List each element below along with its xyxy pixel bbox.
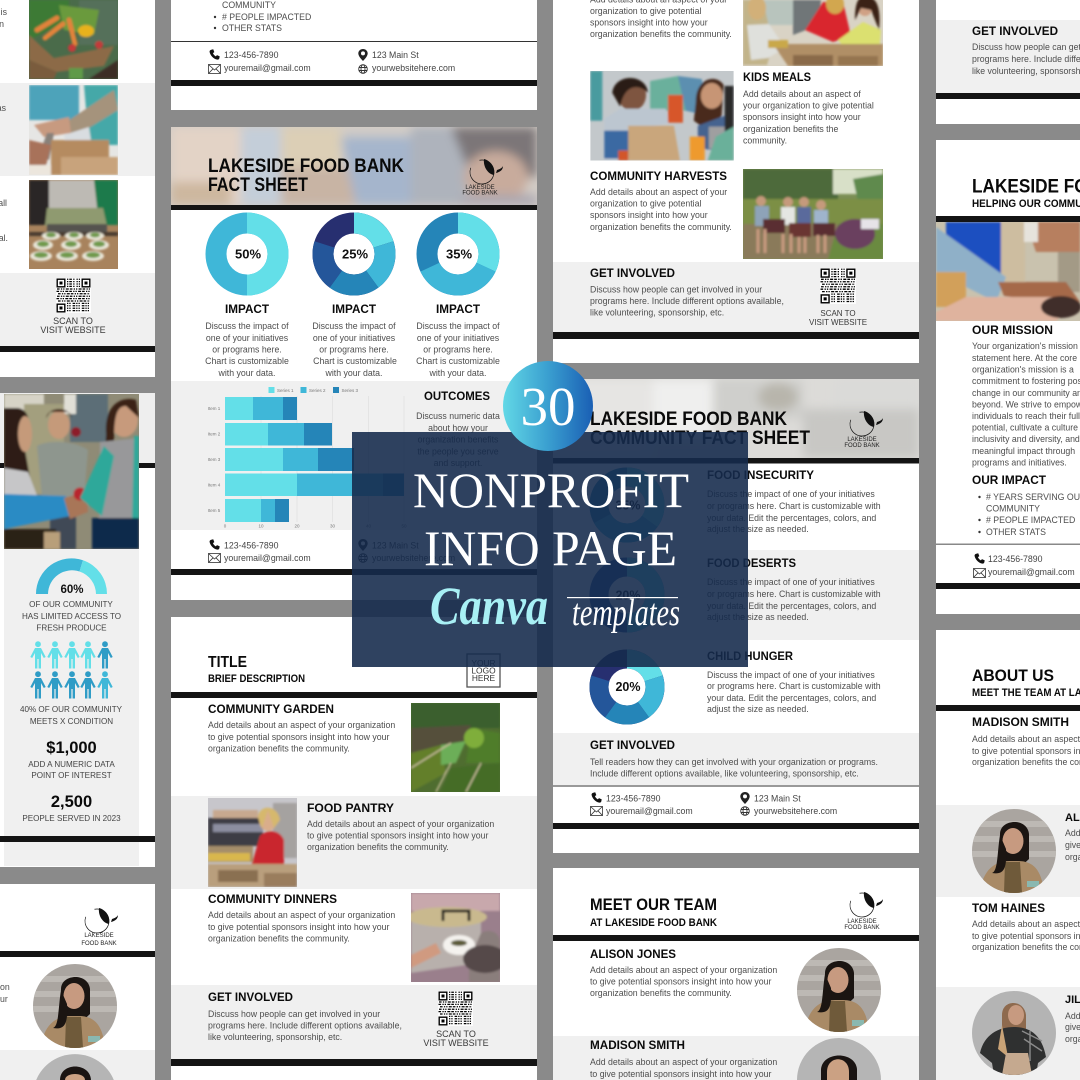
bar: item 2: [225, 423, 332, 446]
text: impact 3: Discuss the impact of: [416, 321, 500, 331]
title: LAKESIDE FOOD BANK: [208, 156, 404, 177]
contact details: youremail@gmail.com: [224, 553, 311, 563]
text: community dinners: organization benefits the community.: [208, 934, 350, 944]
heading: kids meals: KIDS MEALS: [743, 70, 811, 84]
text: impact 2: Discuss the impact of: [312, 321, 396, 331]
title line: info page: INFO PAGE: [424, 520, 677, 576]
text: alison jones: organization benefits the community.: [590, 988, 732, 998]
contact details: 123 Main St: [372, 50, 419, 60]
donut chart: 20% child hunger: [599, 659, 655, 715]
contact details: 123 Main St: [754, 794, 801, 804]
text: impact 3: Chart is customizable: [416, 356, 500, 366]
category labels: Item 1: [208, 406, 221, 411]
photo: pantry volunteer: [208, 798, 297, 887]
heading: alison jones: ALISON JONES: [590, 947, 676, 961]
heading: outcomes: OUTCOMES: [424, 389, 490, 403]
logo: FOOD BANK: [844, 443, 880, 449]
text: outcomes: about how your: [428, 423, 488, 433]
text: first program: organization benefits the community.: [590, 29, 732, 39]
logo: [80, 904, 118, 947]
heading: community harvests: COMMUNITY HARVESTS: [590, 169, 727, 183]
panel: programs sheet left top: [0, 0, 155, 377]
text: community garden: to give potential sponsors insight into how your: [208, 732, 390, 742]
axis labels: 40: [366, 524, 371, 528]
photo: vegetable crate: [29, 0, 118, 79]
stats list: COMMUNITY: [986, 504, 1040, 514]
text: community dinners: to give potential sponsors insight into how your: [208, 922, 390, 932]
contact details: youremail@gmail.com: [606, 806, 693, 816]
bullets: [978, 496, 981, 533]
chart: 60% gauge: [36, 558, 107, 596]
text: community harvests: organization benefits the community.: [590, 222, 732, 232]
contact details: youremail@gmail.com: [224, 63, 311, 73]
bar: item 1: [225, 397, 297, 420]
text: child hunger: your data. Edit the percentages, colors, and: [707, 693, 876, 703]
bar: item 3: [225, 448, 354, 471]
title: TITLE: [208, 654, 247, 671]
logo: FOOD BANK: [81, 941, 117, 947]
text: alison jones: Add details about an aspect of your organization: [590, 965, 777, 975]
title: COMMUNITY FACT SHEET: [590, 428, 810, 449]
text: condition: 40% OF OUR COMMUNITY: [20, 705, 123, 714]
overlay title panel: [352, 432, 748, 667]
stat: 2,500: 2,500: [51, 793, 92, 811]
text: community harvests: Add details about an aspect of your: [590, 187, 727, 197]
title: FACT SHEET: [208, 175, 308, 196]
contact details: 123-456-7890: [224, 540, 279, 550]
text: child hunger: adjust the size as needed.: [707, 704, 809, 714]
gauge value: 60%: [60, 584, 84, 596]
portrait: cropped at frame edge: [36, 1054, 114, 1080]
contact details: [590, 792, 837, 816]
text: condition: MEETS X CONDITION: [30, 717, 113, 726]
legend: Series 2: [309, 388, 326, 393]
badge: 30: [503, 361, 593, 451]
logo placeholder: LOGO: [471, 666, 496, 676]
text: community garden: organization benefits the community.: [208, 744, 350, 754]
logo: FOOD BANK: [462, 190, 498, 196]
text: food pantry: Add details about an aspect of your organization: [307, 819, 494, 829]
text: first program: sponsors insight into how your: [590, 18, 708, 28]
text: food deserts: adjust the size as needed.: [707, 612, 809, 622]
text: kids meals: your organization to give potential: [743, 101, 874, 111]
legend: [268, 387, 359, 393]
portrait: [797, 948, 881, 1032]
text: madison smith: Add details about an aspect of your organization: [590, 1057, 777, 1067]
text: outcomes: and support.: [434, 458, 482, 468]
text: get involved: Tell readers how they can get involved with your organization or programs.: [590, 757, 878, 767]
donut chart: 20% child hunger: 20%: [615, 680, 641, 694]
heading: food insecurity: FOOD INSECURITY: [707, 468, 814, 482]
QR code: [56, 278, 91, 313]
category labels: Item 5: [208, 508, 221, 513]
text: numeric data: POINT OF INTEREST: [31, 771, 112, 780]
text: get involved: programs here. Include different options available,: [208, 1020, 402, 1030]
donut chart: 50%: [216, 223, 278, 285]
text: kids meals: Add details about an aspect of: [743, 89, 861, 99]
panel: right top get involved: [936, 0, 1080, 124]
text: impact 3: one of your initiatives: [417, 333, 500, 343]
stacked bar chart: [208, 387, 407, 528]
text: impact 3: with your data.: [429, 368, 486, 378]
axis labels: 20: [294, 524, 300, 528]
text: get involved: Discuss how people can get involved in your: [590, 284, 762, 294]
header photo: [171, 127, 537, 205]
text: impact 2: one of your initiatives: [313, 333, 396, 343]
portrait: [33, 964, 117, 1048]
axis labels: 0: [224, 524, 227, 528]
text: mission: Your organization's mission: [972, 341, 1078, 351]
donut chart: 35%: [427, 223, 489, 285]
stat: $1,000: $1,000: [46, 739, 97, 757]
donut chart: 35%: [599, 477, 655, 533]
text: madison smith: to give potential sponsors insight into how your: [590, 1069, 772, 1079]
heading: tom haines: TOM HAINES: [972, 901, 1045, 915]
text: food deserts: or programs here. Chart is customizable with: [707, 589, 881, 599]
heading: get involved: GET INVOLVED: [590, 738, 675, 752]
photo: hands packing box: [29, 85, 118, 175]
text: food insecurity: or programs here. Chart is customizable with: [707, 501, 881, 511]
text: get involved: programs here. Include different options available,: [590, 296, 784, 306]
scan to visit website: SCAN TO: [436, 1029, 476, 1039]
photo: kids with food bag: [590, 71, 734, 160]
panel: fact sheet with donuts: [171, 127, 537, 600]
legend: Series 3: [342, 388, 359, 393]
heading: madison smith: MADISON SMITH: [972, 715, 1069, 729]
text: get involved: like volunteering, sponsorship, etc.: [590, 308, 724, 318]
text: food insecurity: Discuss the impact of one of your initiatives: [707, 489, 875, 499]
heading: food deserts: FOOD DESERTS: [707, 556, 796, 570]
contact details: 123-456-7890: [606, 794, 661, 804]
logo placeholder: HERE: [472, 673, 496, 683]
text: limited access: HAS LIMITED ACCESS TO: [22, 612, 121, 621]
legend: Series 1: [277, 388, 294, 393]
cropped body text fragments: is: [1, 7, 8, 17]
text: impact 1: with your data.: [218, 368, 275, 378]
contact details: 123-456-7890: [988, 554, 1043, 564]
photo: children with apples: [4, 394, 139, 549]
text: child hunger: or programs here. Chart is customizable with: [707, 681, 881, 691]
category labels: Item 2: [208, 432, 221, 436]
heading: get involved: GET INVOLVED: [208, 990, 293, 1004]
logo: LAKESIDE: [847, 437, 877, 443]
photo: food buffet: [29, 180, 118, 269]
heading: food pantry: FOOD PANTRY: [307, 801, 394, 815]
text: impact 1: or programs here.: [212, 344, 282, 354]
stats list: # PEOPLE IMPACTED: [986, 515, 1075, 525]
text: food pantry: organization benefits the community.: [307, 842, 449, 852]
text: first program: organization to give potential: [590, 6, 701, 16]
scan to visit website: SCAN TO: [53, 316, 93, 326]
heading: our impact: OUR IMPACT: [972, 473, 1047, 487]
text: impact 2: or programs here.: [319, 344, 389, 354]
contact details: 123 Main St: [372, 540, 419, 550]
contact details: [208, 539, 455, 563]
text: food pantry: to give potential sponsors insight into how your: [307, 830, 489, 840]
contact details: [208, 49, 455, 74]
logo: LAKESIDE: [465, 185, 495, 191]
text: community harvests: sponsors insight into how your: [590, 210, 708, 220]
text: impact 3: or programs here.: [423, 344, 493, 354]
text: mission: programs and initiatives.: [972, 458, 1067, 468]
text: people served: PEOPLE SERVED IN 2023: [22, 814, 121, 823]
axis labels: 50: [401, 524, 407, 528]
logo: [844, 407, 883, 449]
title: ABOUT US: [972, 666, 1054, 685]
panel: community fact sheet: [553, 379, 919, 853]
panel: programs title sheet: [171, 617, 537, 1080]
contact details: yourwebsitehere.com: [754, 806, 837, 816]
badge: 30: 30: [520, 376, 576, 437]
panel: meet the team left bottom: [0, 884, 155, 1080]
QR code: [820, 268, 856, 304]
donut chart: 20%: [599, 567, 655, 623]
text: alison jones: to give potential sponsors insight into how your: [590, 976, 772, 986]
text: food insecurity: your data. Edit the percentages, colors, and: [707, 513, 876, 523]
heading: get involved: GET INVOLVED: [972, 24, 1058, 38]
logo: [462, 155, 503, 196]
text: get involved: Discuss how people can get involved in your: [208, 1009, 380, 1019]
panel: programs sheet with photos: [553, 0, 919, 363]
heading: get involved: GET INVOLVED: [590, 266, 675, 280]
text: get involved: like volunteering, sponsorship, etc.: [208, 1032, 342, 1042]
photo: soup pot: [411, 893, 500, 982]
subtitle: BRIEF DESCRIPTION: [208, 673, 305, 685]
right column clipped to frame: [936, 0, 1080, 1080]
axis labels: 10: [258, 524, 264, 528]
subtitle: AT LAKESIDE FOOD BANK: [590, 917, 717, 929]
scan to visit website: SCAN TO: [820, 309, 856, 318]
logo: LAKESIDE: [84, 933, 114, 939]
text: community harvests: organization to give potential: [590, 199, 701, 209]
title: MEET OUR TEAM: [590, 895, 717, 914]
bar: item 4: [225, 474, 404, 496]
text: get involved: Include different options available, like volunteering, sponsorship, etc.: [590, 768, 859, 778]
script: templates: templates: [572, 592, 680, 634]
category labels: Item 4: [208, 482, 221, 488]
category labels: Item 3: [208, 457, 221, 462]
text: outcomes: organization benefits: [418, 434, 499, 444]
photo: garden beds: [411, 703, 500, 792]
header photo: [584, 379, 919, 458]
text: food deserts: Discuss the impact of one of your initiatives: [707, 577, 875, 587]
panel: community mission contact strip: [171, 0, 537, 110]
donut chart: 25%: 25%: [342, 246, 368, 262]
photo: volunteers at food table: [743, 0, 883, 66]
heading: impact 2: IMPACT: [332, 302, 377, 316]
text: mission: inclusivity and diversity, and: [972, 434, 1080, 444]
donut chart: 35%: 35%: [615, 498, 641, 512]
cropped body text fragments: on: [0, 982, 10, 992]
contact details: yourwebsitehere.com: [372, 553, 455, 563]
text: kids meals: community.: [743, 136, 787, 146]
bar: item 5: [225, 499, 289, 522]
panel: meet our team: [553, 868, 919, 1080]
donut chart: 20%: 20%: [615, 588, 641, 602]
heading: community garden: COMMUNITY GARDEN: [208, 702, 334, 716]
text: mission: individuals to reach their full: [972, 411, 1080, 421]
text: community dinners: Add details about an aspect of your organization: [208, 910, 395, 920]
cropped body text fragments: ur: [0, 994, 8, 1004]
donut chart: 50%: 50%: [235, 246, 261, 262]
donut chart: 25%: [323, 223, 385, 285]
contact details: 123-456-7890: [224, 50, 279, 60]
panel: about us: [936, 630, 1080, 1080]
text: food insecurity: adjust the size as needed.: [707, 524, 809, 534]
text: kids meals: organization benefits the: [743, 124, 838, 134]
logo: [844, 888, 883, 931]
text: limited access: OF OUR COMMUNITY: [29, 600, 113, 609]
contact details: yourwebsitehere.com: [372, 63, 455, 73]
text: impact 1: one of your initiatives: [206, 333, 289, 343]
text: mission: organization's mission is a: [972, 364, 1074, 374]
stats list: OTHER STATS: [986, 527, 1046, 537]
logo placeholder: YOUR: [471, 658, 496, 668]
contact details: youremail@gmail.com: [988, 567, 1075, 577]
axis labels: 30: [330, 524, 335, 528]
text: impact 1: Discuss the impact of: [205, 321, 289, 331]
heading: madison smith: MADISON SMITH: [590, 1038, 685, 1052]
text: mission: meaningful impact through: [972, 446, 1075, 456]
panel: helping our community: [936, 140, 1080, 614]
contact details: [974, 553, 1075, 578]
text: limited access: FRESH PRODUCE: [36, 624, 107, 632]
text: child hunger: Discuss the impact of one of your initiatives: [707, 670, 875, 680]
photo: hands with cans: [936, 222, 1080, 321]
text: impact 2: with your data.: [325, 368, 382, 378]
text: food deserts: your data. Edit the percentages, colors, and: [707, 601, 876, 611]
bullets: [214, 16, 216, 29]
title: LAKESIDE FOOD BANK: [590, 409, 787, 430]
icons: people pictogram: [30, 641, 113, 698]
portrait: [972, 809, 1056, 893]
text: community garden: Add details about an aspect of your organization: [208, 720, 395, 730]
text: mission: statement here. At the core: [972, 353, 1077, 363]
heading: impact 1: IMPACT: [225, 302, 270, 316]
QR code: [438, 991, 473, 1026]
script: canva: Canva: [430, 576, 548, 636]
text: impact 1: Chart is customizable: [205, 356, 289, 366]
stats list: OTHER STATS: [222, 23, 282, 33]
logo placeholder: [467, 654, 500, 687]
scan to visit website: VISIT WEBSITE: [40, 325, 106, 335]
donut chart: 35%: 35%: [446, 246, 472, 262]
portrait: [972, 991, 1056, 1075]
logo: FOOD BANK: [844, 925, 880, 931]
heading: impact 3: IMPACT: [436, 302, 481, 316]
stats list: # PEOPLE IMPACTED: [222, 12, 311, 22]
heading: community dinners: COMMUNITY DINNERS: [208, 892, 337, 906]
text: impact 2: Chart is customizable: [313, 356, 397, 366]
scan to visit website: VISIT WEBSITE: [423, 1038, 489, 1048]
text: outcomes: Discuss numeric data: [416, 411, 500, 421]
text: outcomes: the people you serve: [417, 446, 499, 456]
text: kids meals: sponsors insight into how your: [743, 112, 861, 122]
photo: harvest group: [743, 169, 883, 259]
scan to visit website: VISIT WEBSITE: [809, 318, 867, 327]
heading: child hunger: CHILD HUNGER: [707, 649, 793, 663]
text: numeric data: ADD A NUMERIC DATA: [28, 760, 115, 769]
panel: community stats sidebar: [0, 393, 155, 867]
portrait: cropped at frame edge: [797, 1038, 881, 1080]
stats list: COMMUNITY: [222, 0, 276, 10]
title line: nonprofit: NONPROFIT: [413, 462, 689, 518]
logo: LAKESIDE: [847, 919, 877, 925]
heading: our mission: OUR MISSION: [972, 323, 1053, 337]
